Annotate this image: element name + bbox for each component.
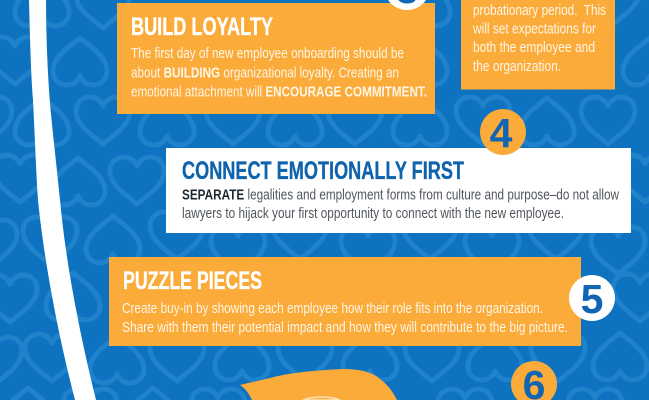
text: probationary body: probationary period. This <box>473 3 606 19</box>
text: build loyalty body: emotional attachment will ENCOURAGE COMMITMENT. <box>131 84 427 100</box>
text: puzzle body: Create buy-in by showing each employee how their role fits into the organization. <box>122 301 543 317</box>
text: puzzle body: Share with them their potential impact and how they will contribute to the big picture. <box>122 320 568 336</box>
badge: number 5: 5 <box>581 276 603 322</box>
orange banner shape <box>240 369 397 400</box>
badge: number 6 <box>511 361 557 400</box>
white curved timeline <box>29 0 96 400</box>
text: probationary body <box>472 3 606 75</box>
heading: build loyalty: BUILD LOYALTY <box>131 13 273 41</box>
text: connect body: lawyers to hijack your first opportunity to connect with the new employee. <box>182 206 564 222</box>
text: puzzle body <box>122 301 568 336</box>
panel: connect emotionally first <box>166 148 631 233</box>
text: probationary body: the organization. <box>473 59 561 75</box>
heading: puzzle pieces: PUZZLE PIECES <box>123 267 262 295</box>
badge: number 5 <box>569 275 615 322</box>
badge: number 4: 4 <box>490 110 513 156</box>
panel: build loyalty <box>117 3 435 114</box>
badge: number 3 <box>384 0 430 12</box>
text: probationary body: both the employee and <box>473 40 595 56</box>
text: probationary body: will set expectations for <box>472 22 596 38</box>
text: connect body <box>182 188 619 222</box>
text: build loyalty body <box>131 46 427 100</box>
text: build loyalty body: The first day of new employee onboarding should be <box>131 46 404 62</box>
panel: puzzle pieces <box>109 257 581 346</box>
text: build loyalty body: about BUILDING organizational loyalty. Creating an <box>131 66 399 82</box>
panel: probationary period <box>461 0 615 90</box>
heading: connect emotionally first: CONNECT EMOTIONALLY FIRST <box>182 157 464 185</box>
badge: number 4 <box>480 109 526 156</box>
